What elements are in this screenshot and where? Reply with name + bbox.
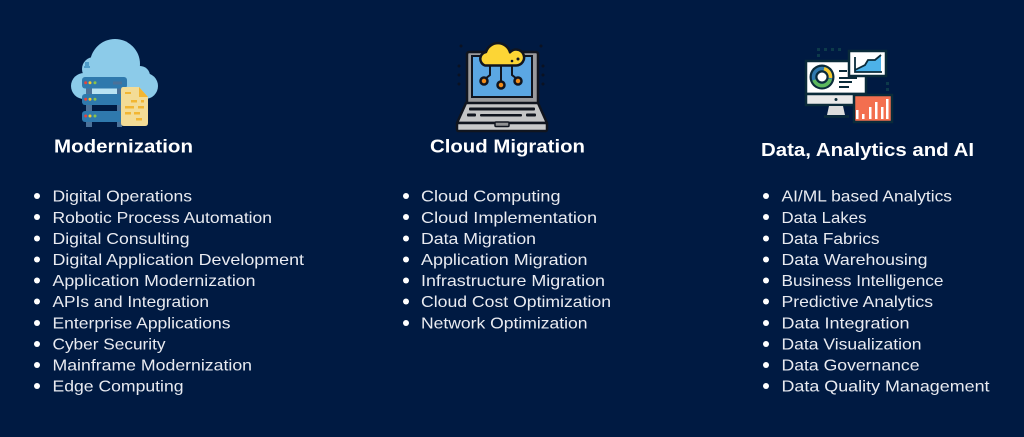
- list: Data, Analytics and AI services: AI/ML based Analytics: [782, 189, 952, 206]
- icon: cloud server with document: [71, 39, 158, 127]
- list: Modernization services: Digital Application Development: [52, 252, 305, 269]
- list: Modernization services: Edge Computing: [52, 379, 184, 396]
- list: Cloud Migration services: Infrastructure Migration: [421, 273, 605, 290]
- list: Data, Analytics and AI services: Data Quality Management: [782, 379, 990, 396]
- icon: laptop with cloud: [457, 43, 547, 131]
- list: Modernization services: Robotic Process Automation: [52, 210, 272, 227]
- list: Modernization services: Application Modernization: [52, 273, 256, 290]
- list: Cloud Migration services: Data Migration: [421, 231, 536, 248]
- list: Data, Analytics and AI services: Business Intelligence: [782, 273, 944, 290]
- heading: Data, Analytics and AI: Data, Analytics and AI: [761, 140, 974, 160]
- list: Cloud Migration services: Cloud Computing: [421, 189, 560, 206]
- list: Data, Analytics and AI services: [763, 189, 990, 396]
- heading: Modernization: Modernization: [54, 136, 193, 156]
- list: Modernization services: APIs and Integration: [52, 294, 209, 311]
- list: Modernization services: Enterprise Applications: [52, 315, 231, 332]
- list: Modernization services: Digital Consulting: [52, 231, 190, 248]
- list: Data, Analytics and AI services: Data Warehousing: [782, 252, 928, 269]
- list: Modernization services: [34, 189, 305, 396]
- heading: Cloud Migration: Cloud Migration: [430, 136, 585, 156]
- list: Data, Analytics and AI services: Data Visualization: [782, 336, 922, 353]
- list: Cloud Migration services: Network Optimization: [421, 315, 588, 332]
- list: Modernization services: Mainframe Modernization: [52, 358, 252, 374]
- list: Modernization services: Cyber Security: [52, 336, 166, 353]
- list: Cloud Migration services: Cloud Implementation: [421, 210, 597, 227]
- list: Cloud Migration services: Application Migration: [421, 252, 588, 269]
- list: Cloud Migration services: Cloud Cost Optimization: [421, 294, 611, 311]
- icon: analytics dashboard: [806, 48, 892, 122]
- list: Data, Analytics and AI services: Data Integration: [782, 315, 910, 332]
- list: Cloud Migration services: [403, 189, 611, 332]
- list: Data, Analytics and AI services: Data Lakes: [782, 210, 866, 227]
- list: Data, Analytics and AI services: Data Governance: [782, 358, 920, 374]
- list: Data, Analytics and AI services: Predictive Analytics: [782, 294, 933, 311]
- list: Modernization services: Digital Operations: [52, 189, 192, 206]
- list: Data, Analytics and AI services: Data Fabrics: [782, 231, 880, 248]
